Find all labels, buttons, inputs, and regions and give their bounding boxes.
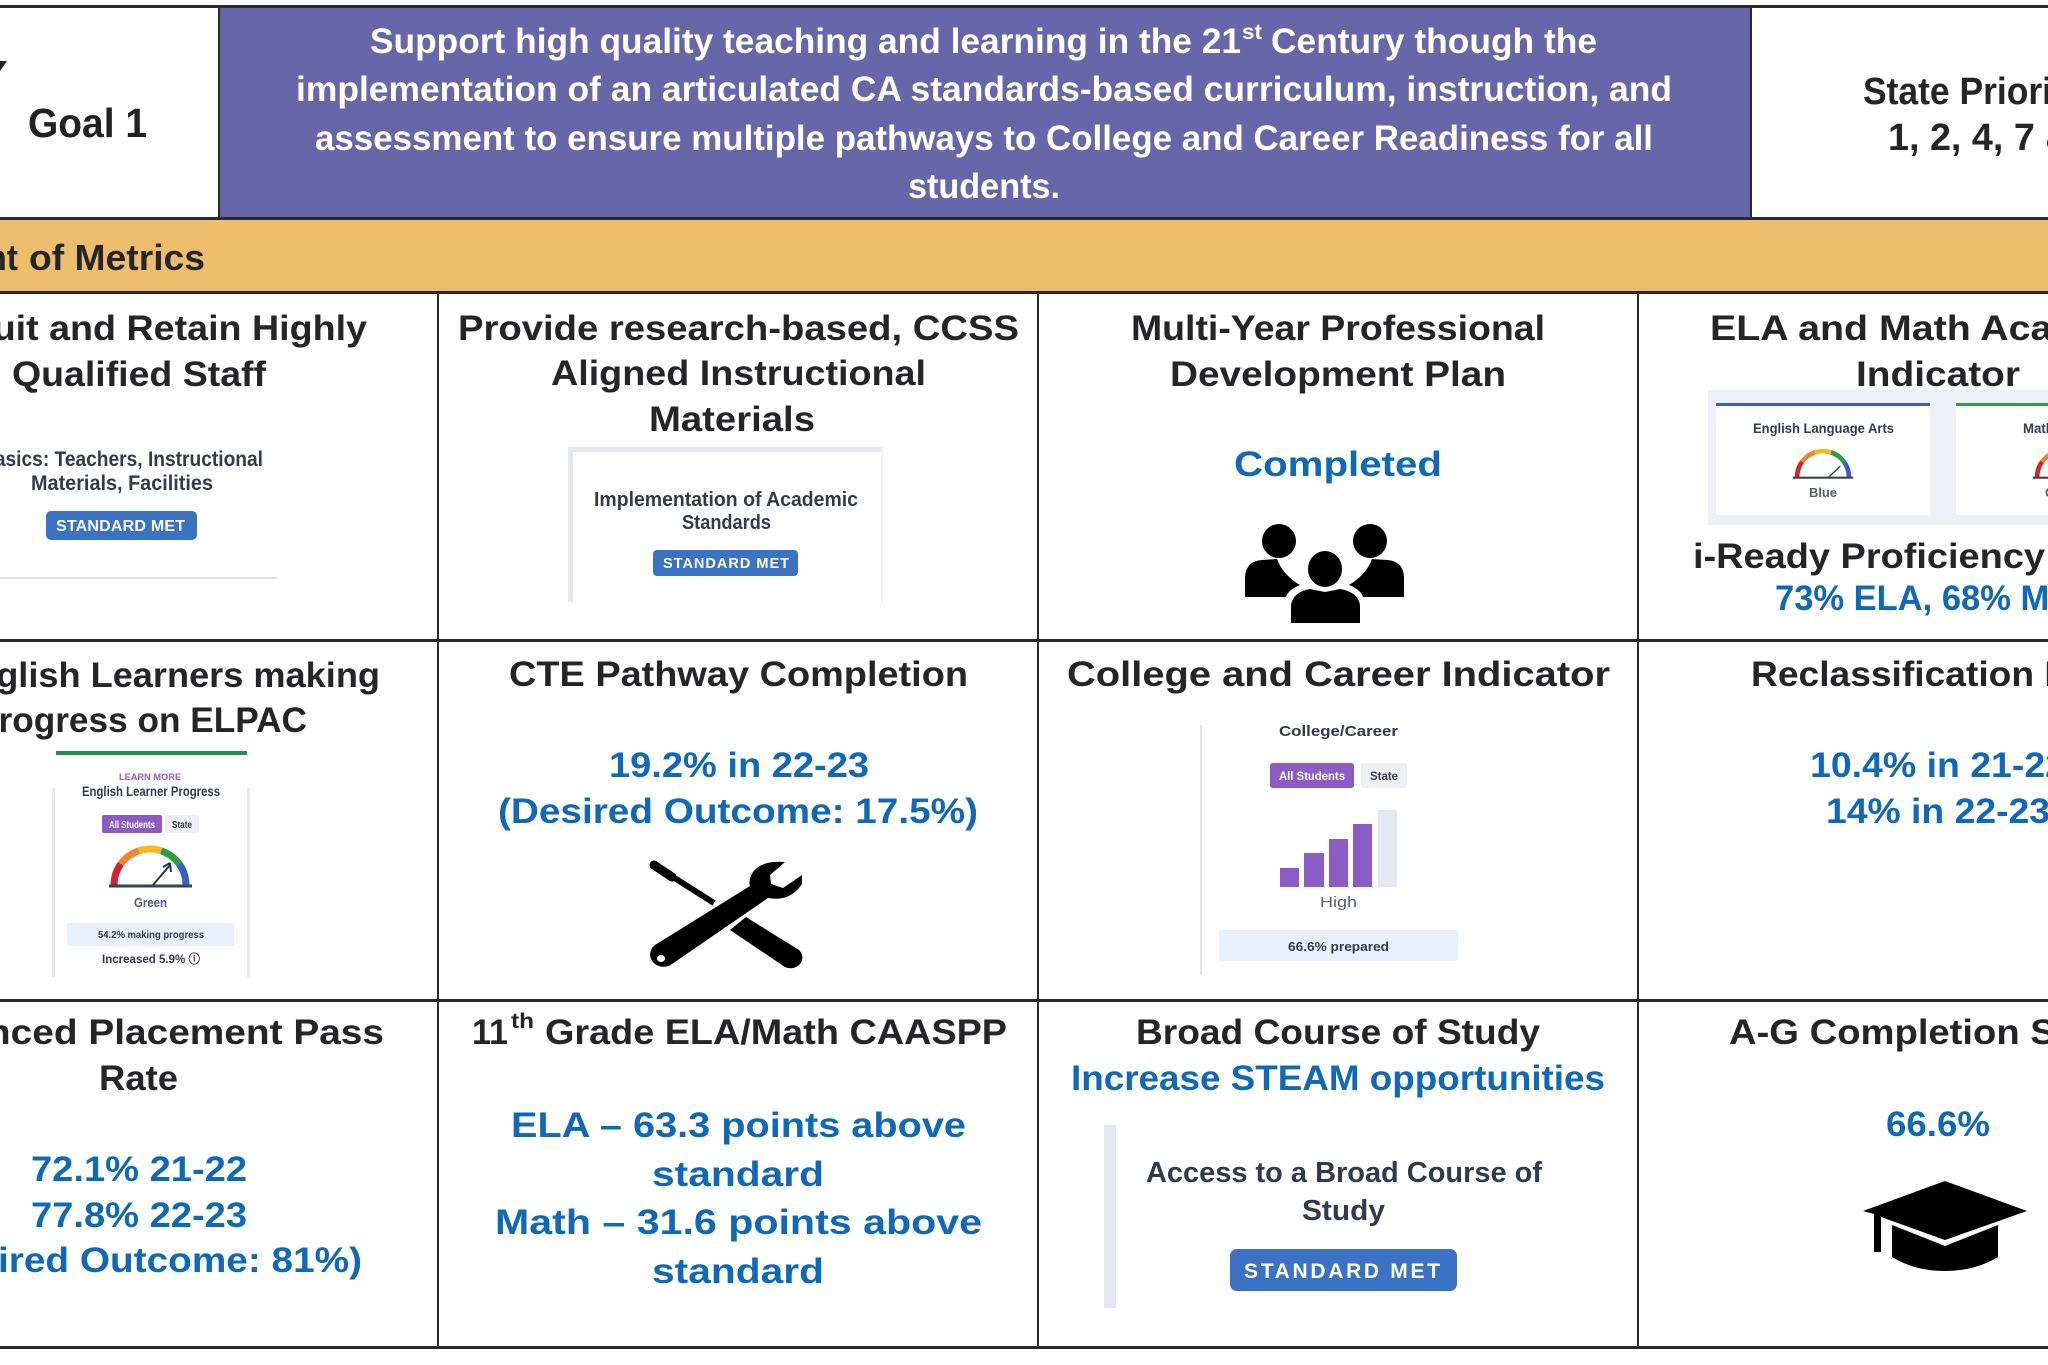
card: college/career: High [1320, 894, 1357, 911]
panel: college and career indicator [1039, 641, 1637, 998]
card: access to a broad course of study: Access to a Broad Course of [1146, 1157, 1542, 1189]
card: english learner progress: All Students [109, 820, 155, 831]
panel: 11th grade CAASPP [439, 1002, 1037, 1346]
panel: instructional materials [439, 293, 1037, 639]
panel: goal statement: st [1242, 21, 1262, 44]
panel: professional development plan: Development Plan [1170, 355, 1506, 394]
icon: graduation cap [1863, 1181, 2027, 1271]
icon: goal icon fragment [0, 61, 7, 71]
card: access to a broad course of study: STANDARD MET [1244, 1260, 1440, 1283]
panel: goal statement: Support high quality teaching and learning in the 21 [370, 22, 1241, 61]
card: college/career [1200, 723, 1458, 975]
panel: broad course of study: Increase STEAM opportunities [1071, 1059, 1605, 1098]
panel: ELA and math academic indicator: Indicator [1856, 355, 2020, 394]
card: english learner progress: 54.2% making progress [98, 929, 204, 941]
card: english learner progress: Green [134, 895, 167, 910]
panel: recruit and retain staff: Qualified Staff [12, 355, 266, 394]
panel: 11th grade CAASPP: Grade ELA/Math CAASPP [545, 1013, 1007, 1052]
panel: broad course of study: Broad Course of Study [1136, 1013, 1541, 1052]
card: implementation of academic standards: STANDARD MET [663, 556, 789, 572]
card: implementation of academic standards: Standards [682, 512, 771, 534]
dashboard cards [1708, 390, 2048, 525]
card: english learner progress: LEARN MORE [119, 772, 181, 782]
panel: 11th grade CAASPP: Math – 31.6 points above [495, 1203, 982, 1242]
card: access to a broad course of study: Study [1302, 1195, 1385, 1227]
card: english learner progress: Increased 5.9% ⓘ [102, 951, 200, 966]
text: basics: Materials, Facilities [31, 472, 213, 495]
card: english learner progress: English Learner Progress [82, 784, 220, 799]
panel: goal statement: Century though the [1271, 22, 1597, 61]
badge: standard met [46, 511, 197, 540]
panel: instructional materials: Aligned Instructional [551, 354, 926, 393]
panel: broad course of study [1039, 1002, 1637, 1346]
panel: goal statement: assessment to ensure multiple pathways to College and Career Readiness for all [315, 119, 1653, 158]
card: english language arts: Blue [1809, 485, 1837, 500]
card: english learner progress [52, 751, 250, 977]
panel: advanced placement pass rate [0, 1002, 437, 1346]
panel: goal statement: students. [908, 167, 1060, 206]
panel: ELA and math academic indicator [1639, 293, 2048, 639]
panel: CTE pathway completion: (Desired Outcome: 17.5%) [498, 792, 978, 831]
panel: 11th grade CAASPP: standard [652, 1155, 824, 1194]
goal heading: Goal 1 [28, 100, 147, 146]
bar chart [1280, 810, 1397, 887]
panel: goal label [0, 7, 218, 218]
panel: english learner progress [0, 641, 437, 998]
panel: advanced placement pass rate: 77.8% 22-23 [31, 1196, 247, 1235]
panel: A-G completion status: 66.6% [1886, 1105, 1990, 1144]
card: college/career: College/Career [1279, 723, 1398, 740]
panel: recruit and retain staff [0, 293, 437, 639]
panel: instructional materials: Provide research-based, CCSS [458, 309, 1019, 348]
panel: college and career indicator: College and Career Indicator [1067, 655, 1610, 694]
panel: 11th grade CAASPP: 11 [472, 1013, 508, 1052]
panel: ELA and math academic indicator: i-Ready Proficiency [1693, 537, 2046, 576]
panel: advanced placement pass rate: 72.1% 21-22 [31, 1150, 247, 1189]
panel: professional development plan: Completed [1234, 445, 1442, 484]
panel: goal statement: implementation of an articulated CA standards-based curriculum, instruction, and [296, 70, 1672, 109]
badge: standard met: STANDARD MET [56, 518, 185, 535]
icon: people group [1245, 524, 1404, 623]
card: access to a broad course of study [1104, 1125, 1542, 1308]
card: college/career: State [1370, 769, 1398, 783]
card: english language arts [1716, 403, 1930, 515]
panel: CTE pathway completion [439, 641, 1037, 998]
text: basics [0, 448, 263, 495]
card: english learner progress: State [172, 820, 192, 831]
panel: reclassification rate: 10.4% in 21-22 [1810, 746, 2048, 785]
card: mathematics [1956, 403, 2048, 515]
panel: state priorities [1752, 7, 2048, 218]
card: implementation of academic standards [568, 447, 883, 602]
panel: professional development plan [1039, 293, 1637, 639]
panel: professional development plan: Multi-Year Professional [1131, 309, 1545, 348]
panel: CTE pathway completion: 19.2% in 22-23 [609, 746, 869, 785]
panel: advanced placement pass rate: Rate [99, 1059, 178, 1098]
panel: 11th grade CAASPP: ELA – 63.3 points above [511, 1106, 966, 1145]
panel: CTE pathway completion: CTE Pathway Completion [509, 655, 968, 694]
panel: reclassification rate: 14% in 22-23 [1826, 792, 2048, 831]
section heading bar [0, 219, 2048, 292]
card: implementation of academic standards: Implementation of Academic [594, 489, 858, 511]
card: college/career: All Students [1279, 769, 1345, 783]
panel: goal statement [219, 7, 1751, 218]
panel: 11th grade CAASPP: th [511, 1010, 534, 1033]
card: english language arts: English Language Arts [1753, 420, 1894, 436]
panel: instructional materials: Materials [649, 400, 815, 439]
section heading bar: of Metrics [29, 237, 205, 278]
icon: wrench and screwdriver [650, 862, 802, 968]
card: college/career: 66.6% prepared [1288, 939, 1389, 954]
panel: reclassification rate [1639, 641, 2048, 998]
panel: 11th grade CAASPP: standard [652, 1252, 824, 1291]
panel: A-G completion status [1639, 1002, 2048, 1346]
gauge: green [109, 849, 192, 886]
